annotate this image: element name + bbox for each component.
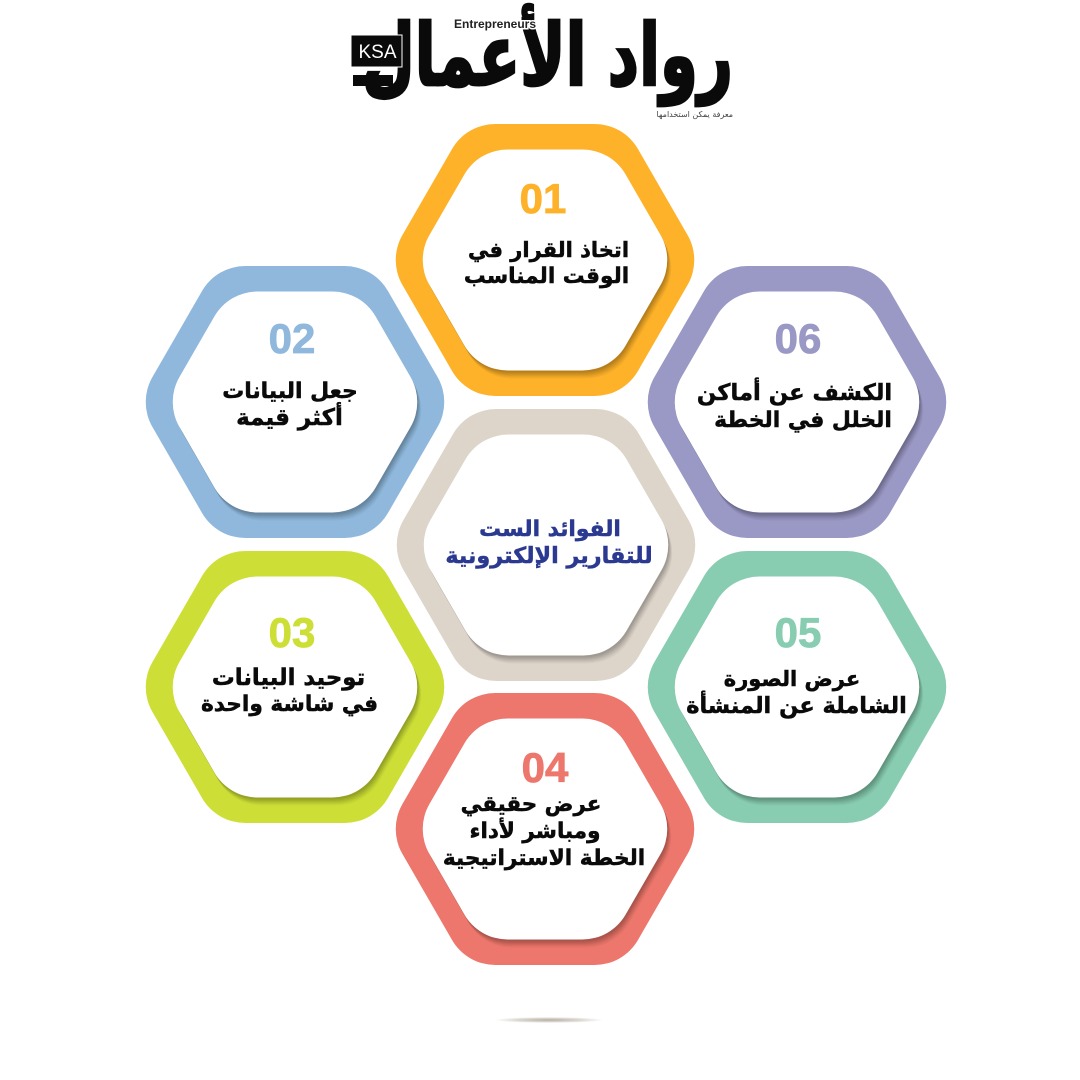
- number 02: 02: [269, 315, 315, 362]
- text 04: الخطة الاستراتيجية: [443, 846, 645, 871]
- center hexagon: [397, 409, 695, 681]
- hexagon 05: [648, 551, 946, 823]
- text 03: توحيد البيانات: [212, 665, 365, 691]
- logo KSA badge: KSA: [358, 42, 397, 63]
- text 02: [222, 379, 358, 431]
- logo English label: Entrepreneurs: [454, 17, 536, 31]
- text 03: في شاشة واحدة: [201, 692, 378, 717]
- ground shadow: [495, 1017, 603, 1023]
- text 06: الخلل في الخطة: [714, 408, 892, 433]
- text 04: عرض حقيقي: [461, 792, 601, 817]
- text 04: ومباشر لأداء: [470, 816, 600, 844]
- text 06: الكشف عن أماكن: [697, 377, 892, 406]
- text 02: أكثر قيمة: [236, 401, 343, 431]
- text 05: عرض الصورة: [724, 667, 860, 691]
- text 05: [686, 667, 907, 719]
- hexagon 01: [396, 124, 694, 396]
- logo bar under badge: [353, 75, 393, 86]
- number 04: 04: [522, 744, 569, 791]
- number 06: 06: [775, 315, 821, 362]
- text 01: [464, 238, 629, 289]
- text 06: [697, 377, 892, 433]
- logo wordmark: رواد الأعمال: [362, 4, 733, 107]
- text 02: جعل البيانات: [222, 379, 358, 404]
- text 04: [443, 792, 645, 871]
- logo KSA badge: [351, 35, 402, 67]
- hexagon 03: [146, 551, 444, 823]
- text 01: الوقت المناسب: [464, 264, 629, 289]
- hexagon 04: [396, 693, 694, 965]
- center title: [445, 517, 653, 569]
- text 01: اتخاذ القرار في: [468, 238, 629, 262]
- hexagon 06: [648, 266, 946, 538]
- number 05: 05: [775, 609, 821, 656]
- number 01: 01: [520, 175, 566, 222]
- logo tagline: معرفة يمكن استخدامها: [657, 110, 733, 119]
- text 03: [201, 665, 378, 717]
- hexagon 02: [146, 266, 444, 538]
- text 05: الشاملة عن المنشأة: [686, 690, 907, 719]
- logo: [351, 4, 733, 119]
- center title: الفوائد الست: [479, 517, 621, 542]
- center title: للتقارير الإلكترونية: [445, 543, 653, 569]
- number 03: 03: [269, 609, 315, 656]
